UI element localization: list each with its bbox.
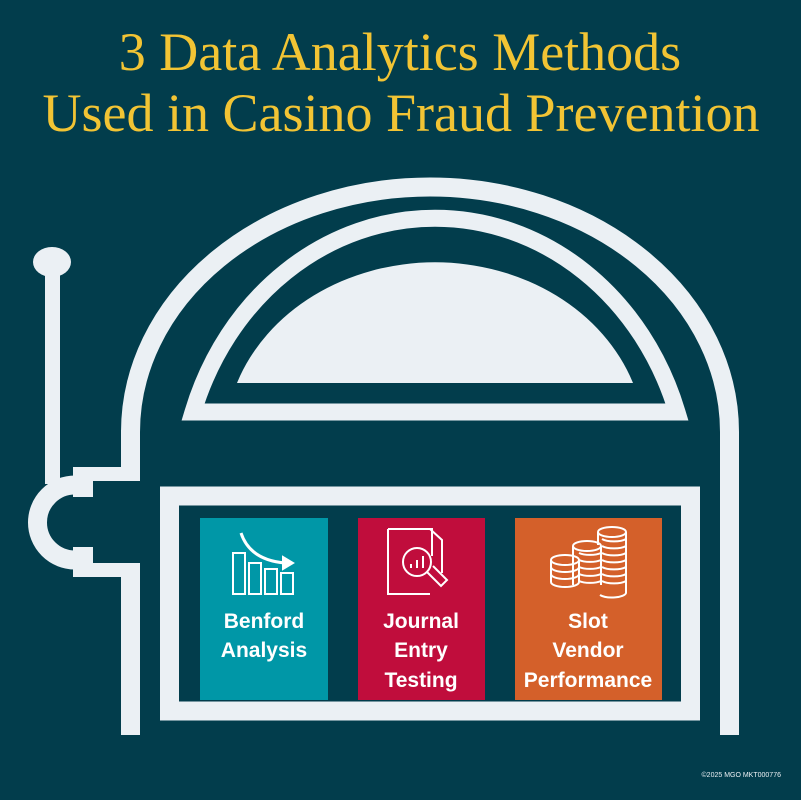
icon: document with magnifier bbox=[388, 529, 447, 594]
dome bbox=[193, 218, 677, 412]
card: Slot Vendor Performance bbox=[515, 518, 662, 700]
title: 3 Data Analytics Methods bbox=[119, 22, 681, 82]
display box bbox=[170, 496, 690, 711]
icon: coin stacks bbox=[551, 527, 626, 597]
card: Slot Vendor Performance: Slot bbox=[568, 610, 608, 633]
card: Benford Analysis: Benford bbox=[224, 610, 304, 633]
title bbox=[43, 22, 759, 143]
card: Benford Analysis: Analysis bbox=[221, 639, 307, 662]
card: Journal Entry Testing: Entry bbox=[394, 639, 448, 662]
card: Journal Entry Testing: Testing bbox=[384, 669, 458, 692]
slot machine outline bbox=[33, 187, 730, 735]
card: Slot Vendor Performance: Performance bbox=[524, 669, 652, 692]
title: Used in Casino Fraud Prevention bbox=[43, 83, 759, 143]
lever bbox=[33, 247, 71, 484]
icon: declining bars bbox=[233, 533, 293, 594]
card: Benford Analysis bbox=[200, 518, 328, 700]
card: Journal Entry Testing: Journal bbox=[383, 610, 459, 633]
copyright: ©2025 MGO MKT000776 bbox=[702, 771, 781, 779]
card: Slot Vendor Performance: Vendor bbox=[552, 639, 624, 662]
card: Journal Entry Testing bbox=[358, 518, 485, 700]
